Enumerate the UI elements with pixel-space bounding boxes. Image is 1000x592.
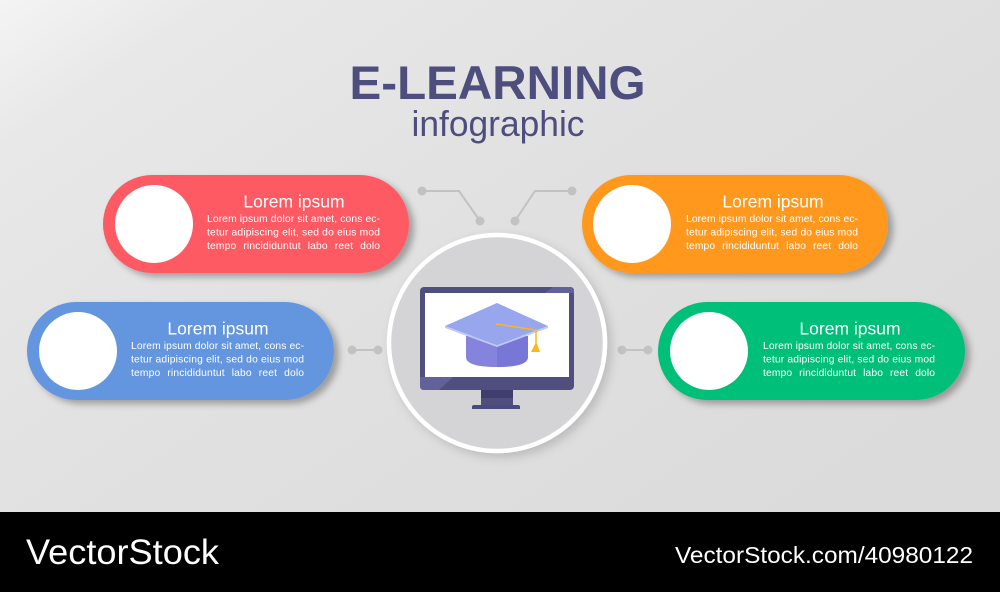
panel: blue left (27, 302, 334, 400)
graduation cap (445, 303, 548, 367)
red heading: Lorem ipsum (243, 192, 345, 212)
central circle (389, 235, 605, 451)
orange heading: Lorem ipsum (722, 192, 824, 212)
monitor screen (425, 293, 569, 377)
connector: top left (418, 186, 484, 226)
monitor frame (420, 287, 574, 390)
orange body text (686, 214, 858, 252)
cap board (445, 303, 548, 345)
subtitle: infographic (412, 103, 584, 144)
blue body text: Lorem ipsum dolor sit amet, cons ec- (131, 341, 304, 352)
green heading: Lorem ipsum (799, 318, 901, 338)
orange icon circle (593, 185, 671, 263)
orange body text: tempo rincididuntut labo reet dolo (686, 241, 858, 252)
red body text: Lorem ipsum dolor sit amet, cons ec- (207, 214, 380, 225)
panel: orange top right (582, 175, 888, 273)
cap body (466, 336, 528, 367)
icon: computer monitor with graduation cap (420, 287, 574, 409)
red pill (103, 175, 409, 273)
red body text: tetur adipiscing elit, sed do eius mod (207, 228, 380, 238)
blue heading: Lorem ipsum (167, 318, 269, 338)
connector: right (618, 346, 652, 354)
title: E-LEARNING (350, 56, 646, 109)
red body text (207, 214, 380, 252)
blue body text: tetur adipiscing elit, sed do eius mod (131, 354, 304, 366)
footer url: VectorStock.com/40980122 (675, 542, 973, 568)
green pill (658, 302, 965, 400)
green body text: tempo rincididuntut labo reet dolo (763, 368, 935, 379)
monitor stand (472, 390, 520, 409)
panel: red top left (103, 175, 409, 273)
orange body text: tetur adipiscing elit, sed do eius mod (686, 228, 858, 238)
green body text: tetur adipiscing elit, sed do eius mod (763, 354, 935, 366)
red body text: tempo rincididuntut labo reet dolo (207, 241, 380, 252)
orange body text: Lorem ipsum dolor sit amet, cons ec- (686, 214, 858, 225)
blue pill (27, 302, 334, 400)
blue body text (131, 341, 304, 379)
panel: green right (658, 302, 965, 400)
footer logo: VectorStock (26, 533, 220, 572)
cap board edge (445, 326, 548, 347)
orange pill (582, 175, 888, 273)
red icon circle (115, 185, 193, 263)
footer bar (0, 512, 1000, 592)
connector: top right (510, 186, 576, 226)
green body text (763, 341, 935, 379)
blue body text: tempo rincididuntut labo reet dolo (131, 368, 304, 379)
green body text: Lorem ipsum dolor sit amet, cons ec- (763, 341, 935, 352)
blue icon circle (39, 312, 117, 390)
tassel (496, 324, 540, 352)
green icon circle (670, 312, 748, 390)
connector: left (348, 346, 382, 354)
